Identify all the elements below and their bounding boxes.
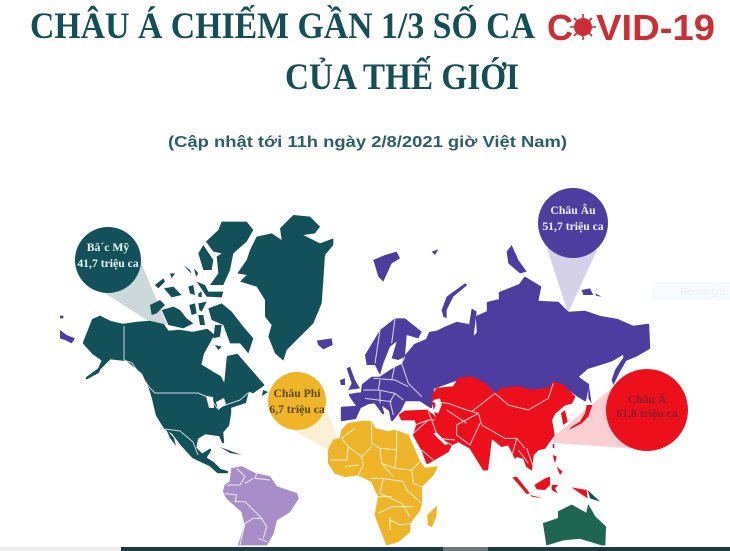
callout: North America: 41,7 triệu ca — [77, 257, 139, 270]
callout: Asia: Châu Á — [628, 392, 667, 406]
Scandinavia and British Isles — [340, 318, 422, 415]
callout: Africa: 6,7 triệu ca — [269, 403, 325, 416]
Russian Arctic islands and Kamchatka — [373, 245, 627, 403]
Chukotka tip — [60, 316, 75, 343]
callout: North America: Bă´c Mỹ — [87, 241, 129, 254]
Baja California and Caribbean — [166, 390, 268, 455]
border lines: North America — [124, 326, 248, 455]
callout: Africa: Châu Phi — [273, 387, 321, 400]
callout: North America — [75, 227, 167, 325]
world map: North America — [60, 215, 333, 472]
world map: Africa — [328, 421, 437, 545]
bottom bar — [0, 547, 730, 551]
faint rectangle tag: Rectangle — [680, 287, 725, 298]
Madagascar — [428, 507, 437, 527]
Southeast Asian islands — [512, 444, 588, 498]
COVID-19 logo: VID-19 — [596, 7, 715, 48]
callout: Europe — [538, 188, 608, 313]
border lines: Europe — [363, 318, 422, 415]
COVID-19 logo — [547, 7, 715, 48]
title — [30, 3, 535, 98]
faint rectangle tag — [652, 282, 730, 300]
world map: Asia and Oceania — [399, 377, 606, 545]
title: CỦA THẾ GIỚI — [285, 55, 519, 98]
callout: Europe: Châu Âu — [550, 203, 596, 217]
callout: Europe: 51,7 triệu ca — [542, 220, 604, 233]
Asia mainland — [399, 377, 575, 470]
subtitle: (Cập nhật tới 11h ngày 2/8/2021 giờ Việt Nam) — [168, 134, 567, 151]
Australia — [543, 505, 606, 545]
callout: Asia — [553, 369, 688, 451]
COVID-19 logo: C — [547, 7, 573, 48]
icon: virus — [570, 14, 596, 40]
border lines: South America — [225, 468, 270, 545]
border lines: Asia — [413, 383, 553, 467]
border lines: Africa — [330, 422, 422, 530]
Great Lakes — [206, 396, 226, 410]
Greenland — [237, 215, 333, 361]
title: CHÂU Á CHIẾM GẦN 1/3 SỐ CA — [30, 3, 535, 47]
Korea and Japan — [561, 405, 592, 430]
callout: Asia: 61,8 triệu ca — [616, 407, 678, 420]
Iceland — [317, 338, 333, 349]
New Guinea east — [588, 490, 600, 502]
Caspian Sea and Persian Gulf — [433, 398, 448, 445]
world map: Europe and Russia — [317, 245, 649, 420]
callout: Africa — [268, 372, 337, 450]
Arctic Canada and Greenland — [150, 215, 333, 361]
Arctic islands — [150, 222, 253, 353]
world map: South America — [223, 467, 298, 545]
North America mainland — [84, 317, 263, 472]
